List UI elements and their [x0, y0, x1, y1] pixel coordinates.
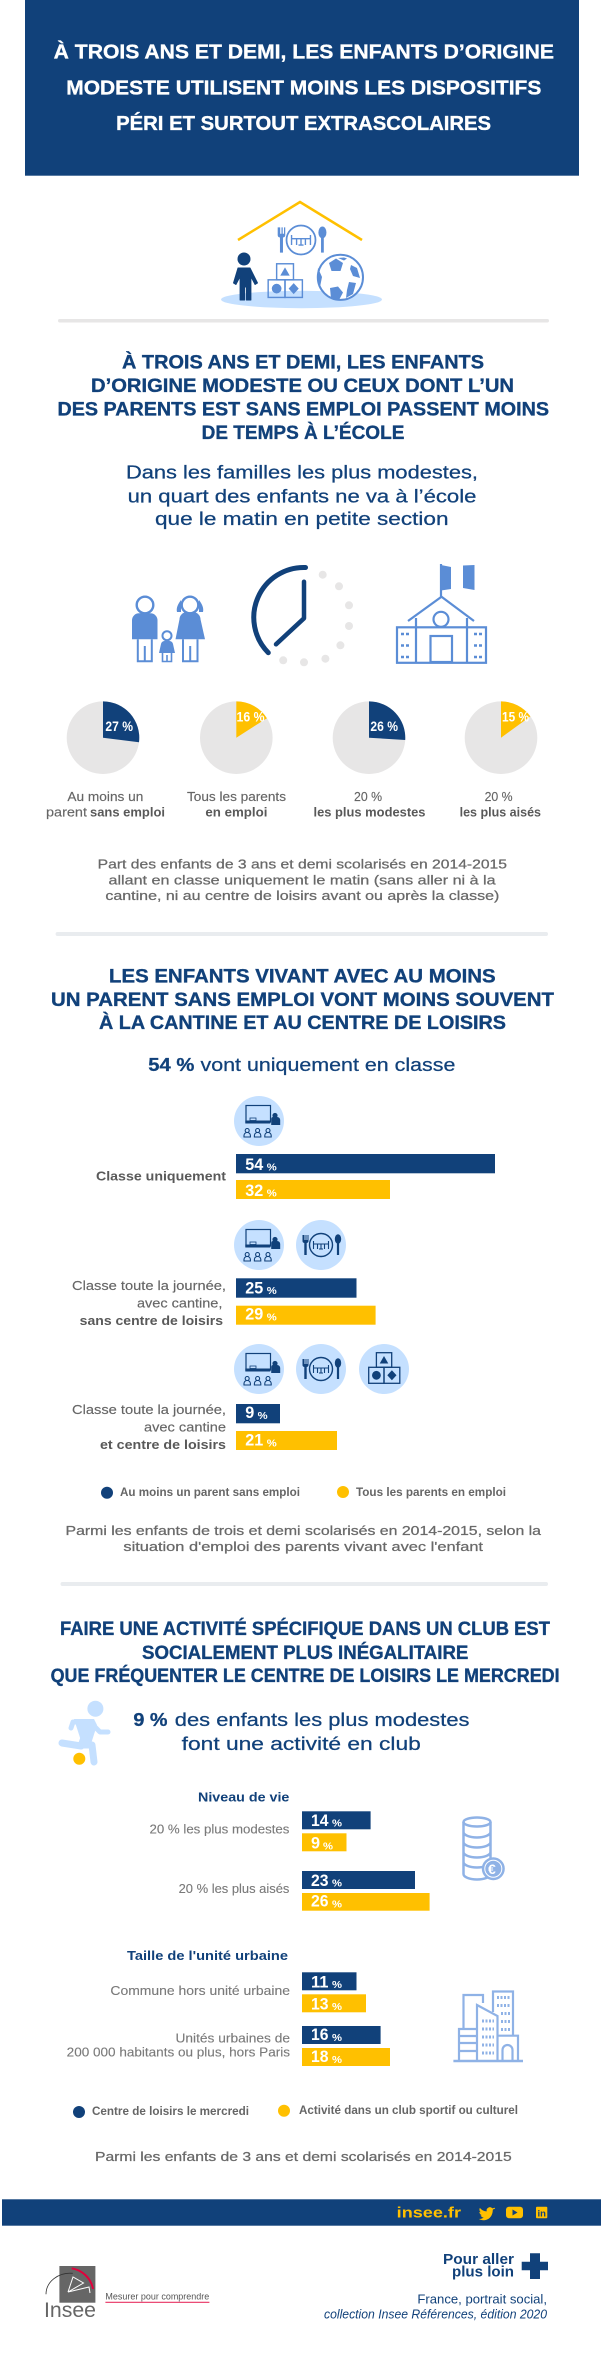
further reading block: France, portrait social,	[417, 2291, 547, 2306]
legend: section 3: Centre de loisirs le mercredi	[92, 2106, 249, 2118]
bar group: full day with canteen, no leisure centre: %	[267, 1286, 277, 1297]
bar group: full day with canteen and leisure centre: 21	[245, 1431, 263, 1450]
footer bar	[2, 2199, 601, 2226]
chart: standard of living: Niveau de vie	[198, 1789, 289, 1804]
icon: classroom	[234, 1096, 284, 1146]
pie: all parents employed, 16 %	[200, 701, 273, 774]
chart: urban unit size: 16	[311, 2025, 328, 2044]
chart: standard of living: %	[332, 1818, 342, 1830]
pie labels: 20 %	[354, 789, 382, 804]
bar group: class only: %	[267, 1162, 277, 1174]
bar group: full day with canteen, no leisure centre: sans centre de loisirs	[80, 1313, 223, 1328]
bar group: class only	[96, 1154, 495, 1200]
icon: city buildings	[453, 1992, 523, 2061]
pie: 20 % most modest, 26 %	[333, 701, 405, 774]
pie labels	[46, 789, 541, 820]
pie labels: les plus aisés	[460, 805, 541, 820]
pie labels: Au moins un	[67, 789, 143, 804]
subheading: section 3	[133, 1709, 470, 1754]
heading: section 2: LES ENFANTS VIVANT AVEC AU MOINS	[109, 966, 496, 987]
bar group: full day with canteen and leisure centre: avec cantine	[144, 1419, 226, 1434]
chart: urban unit size: Taille de l'unité urbaine	[127, 1948, 288, 1963]
subheading: section 2: vont uniquement en classe	[200, 1054, 455, 1075]
further reading block	[324, 2251, 548, 2322]
bar group: class only: Classe uniquement	[96, 1169, 227, 1184]
icon: child kicking a ball	[62, 1701, 108, 1765]
chart: standard of living: %	[332, 1878, 342, 1890]
icon: twitter	[479, 2207, 495, 2220]
title banner	[25, 0, 579, 176]
subheading: section 1	[126, 461, 478, 529]
further reading block: plus loin	[452, 2263, 514, 2280]
heading: section 2	[51, 966, 554, 1034]
bar group: full day with canteen, no leisure centre: %	[267, 1312, 277, 1324]
icon: clock showing half-day	[254, 567, 353, 666]
further reading block: collection Insee Références, édition 2020	[324, 2307, 548, 2322]
note: section 1: cantine, ni au centre de loisirs avant ou après la classe)	[105, 888, 499, 903]
heading: section 3: FAIRE UNE ACTIVITÉ SPÉCIFIQUE DANS UN CLUB EST	[60, 1618, 550, 1640]
logo: Insee: Insee	[44, 2299, 96, 2322]
chart: standard of living: 20 % les plus modestes	[150, 1822, 289, 1836]
divider	[56, 932, 548, 936]
heading: section 3	[51, 1618, 560, 1687]
bar group: full day with canteen, no leisure centre: avec cantine,	[137, 1295, 222, 1310]
bar group: class only: 32	[245, 1181, 263, 1200]
legend: section 2: Au moins un parent sans emploi	[120, 1487, 300, 1499]
chart: urban unit size: %	[332, 2002, 342, 2013]
chart: urban unit size: 200 000 habitants ou plus, hors Paris	[67, 2045, 290, 2059]
logo: Insee	[44, 2266, 209, 2322]
note: section 1	[98, 856, 507, 903]
title banner: PÉRI ET SURTOUT EXTRASCOLAIRES	[116, 112, 491, 135]
note: section 1: Part des enfants de 3 ans et demi scolarisés en 2014-2015	[98, 856, 507, 871]
subheading: section 2: 54 %	[148, 1054, 194, 1075]
bar group: full day with canteen, no leisure centre: 29	[245, 1304, 263, 1323]
icon: plus	[522, 2253, 548, 2279]
note: section 2: situation d'emploi des parents vivant avec l'enfant	[123, 1539, 483, 1554]
heading: section 1	[58, 351, 549, 444]
chart: standard of living: 26	[311, 1892, 328, 1911]
footer bar: insee.fr	[397, 2204, 461, 2221]
icon: linkedin: in	[538, 2208, 546, 2220]
heading: section 1: DES PARENTS EST SANS EMPLOI PASSENT MOINS	[58, 399, 549, 420]
chart: standard of living: 9	[311, 1834, 320, 1853]
heading: section 2: UN PARENT SANS EMPLOI VONT MOINS SOUVENT	[51, 990, 554, 1011]
chart: standard of living	[150, 1789, 430, 1911]
pie: all parents employed, 16 %: 16 %	[236, 710, 264, 725]
bar group: full day with canteen and leisure centre: %	[267, 1438, 277, 1450]
note: section 2	[66, 1523, 542, 1554]
pie: 20 % wealthiest, 15 %	[465, 701, 537, 774]
logo: Insee: Mesurer pour comprendre	[105, 2292, 209, 2303]
icon: family	[132, 597, 205, 662]
pie labels: les plus modestes	[314, 805, 426, 820]
legend: section 2	[101, 1486, 506, 1499]
title banner: À TROIS ANS ET DEMI, LES ENFANTS D’ORIGINE	[54, 40, 554, 63]
divider	[60, 1582, 548, 1586]
further reading block: Pour aller	[443, 2251, 514, 2268]
icon: classroom	[234, 1220, 284, 1270]
subheading: section 3: des enfants les plus modestes	[175, 1709, 470, 1730]
chart: standard of living: 20 % les plus aisés	[179, 1882, 289, 1896]
icon: youtube	[506, 2207, 523, 2218]
heading: section 3: SOCIALEMENT PLUS INÉGALITAIRE	[142, 1642, 468, 1664]
icon: stack of euro coins: €	[488, 1861, 496, 1877]
chart: standard of living: %	[323, 1842, 333, 1852]
bar group: full day with canteen and leisure centre	[72, 1402, 337, 1452]
chart: urban unit size: %	[332, 2055, 342, 2066]
chart: urban unit size: Unités urbaines de	[176, 2031, 290, 2045]
legend: section 3	[73, 2105, 518, 2118]
legend: section 2: Tous les parents en emploi	[356, 1487, 506, 1499]
icon: linkedin	[536, 2207, 547, 2220]
pie: at least one parent without job, 27 %	[67, 701, 139, 774]
chart: urban unit size: Commune hors unité urbaine	[110, 1984, 290, 1998]
chart: urban unit size: 13	[311, 1994, 328, 2013]
title banner: MODESTE UTILISENT MOINS LES DISPOSITIFS	[66, 77, 541, 99]
bar group: full day with canteen and leisure centre: 9	[245, 1403, 254, 1422]
heading: section 2: À LA CANTINE ET AU CENTRE DE LOISIRS	[99, 1012, 506, 1034]
chart: standard of living: %	[332, 1900, 342, 1910]
bar group: class only: 54	[245, 1155, 264, 1174]
bar group: full day with canteen and leisure centre: et centre de loisirs	[100, 1437, 226, 1452]
chart: urban unit size: %	[332, 1980, 342, 1991]
pie labels: 20 %	[485, 789, 513, 804]
heading: section 1: D’ORIGINE MODESTE OU CEUX DONT L’UN	[91, 376, 514, 397]
pie labels: en emploi	[205, 805, 267, 820]
note: section 1: allant en classe uniquement le matin (sans aller ni à la	[108, 872, 497, 887]
icon: canteen	[296, 1220, 346, 1270]
heading: section 1: DE TEMPS À L’ÉCOLE	[202, 422, 404, 444]
chart: urban unit size: 11	[311, 1972, 328, 1991]
bar group: full day with canteen and leisure centre: Classe toute la journée,	[72, 1402, 226, 1417]
chart: standard of living: 23	[311, 1871, 328, 1890]
bar group: full day with canteen, no leisure centre: Classe toute la journée,	[72, 1278, 226, 1293]
legend: section 3: Activité dans un club sportif ou culturel	[299, 2105, 518, 2117]
subheading: section 1: un quart des enfants ne va à l’école	[128, 485, 476, 506]
icon: building blocks	[359, 1344, 409, 1394]
icon: classroom	[234, 1344, 284, 1394]
bar group: full day with canteen, no leisure centre	[72, 1278, 376, 1328]
heading: section 1: À TROIS ANS ET DEMI, LES ENFANTS	[122, 351, 484, 373]
icon: house with child, meal, blocks and ball	[221, 202, 382, 308]
bar group: class only: %	[267, 1188, 277, 1200]
note: section 2: Parmi les enfants de trois et demi scolarisés en 2014-2015, selon la	[66, 1523, 542, 1538]
pie: 20 % wealthiest, 15 %: 15 %	[502, 710, 529, 725]
pie: 20 % most modest, 26 %: 26 %	[370, 719, 398, 734]
bar group: full day with canteen and leisure centre: %	[258, 1411, 268, 1422]
note: section 3: Parmi les enfants de 3 ans et demi scolarisés en 2014-2015	[95, 2149, 512, 2164]
subheading: section 3: 9 %	[133, 1709, 168, 1730]
chart: urban unit size: 18	[311, 2047, 328, 2066]
subheading: section 1: Dans les familles les plus modestes,	[126, 461, 478, 482]
chart: urban unit size	[67, 1948, 390, 2066]
subheading: section 3: font une activité en club	[182, 1733, 421, 1754]
subheading: section 1: que le matin en petite section	[155, 508, 448, 529]
pie labels: Tous les parents	[187, 789, 287, 804]
icon: school with flag	[397, 564, 486, 663]
chart: standard of living: 14	[311, 1811, 329, 1830]
icon: canteen	[296, 1344, 346, 1394]
icon: stack of euro coins	[464, 1818, 505, 1880]
pie labels: sans emploi	[90, 805, 165, 820]
bar group: full day with canteen, no leisure centre: 25	[245, 1278, 263, 1297]
divider	[58, 319, 549, 322]
pie: at least one parent without job, 27 %: 27 %	[105, 719, 133, 734]
heading: section 3: QUE FRÉQUENTER LE CENTRE DE LOISIRS LE MERCREDI	[51, 1665, 560, 1687]
pie labels: parent	[46, 805, 87, 820]
chart: urban unit size: %	[332, 2033, 342, 2044]
